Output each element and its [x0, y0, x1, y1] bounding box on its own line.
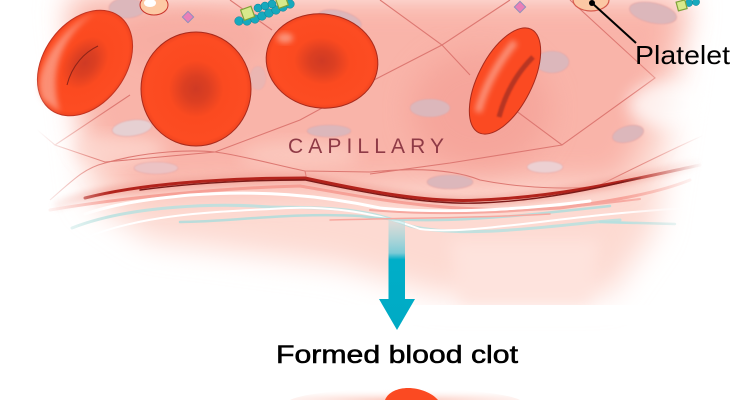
label: capillary: CAPILLARY — [288, 135, 444, 158]
red blood cell 1 — [18, 0, 152, 134]
down arrow — [379, 220, 415, 330]
vessel wall — [50, 160, 715, 210]
fibrin chain left — [235, 0, 294, 25]
platelet right — [573, 0, 609, 11]
heading: formed blood clot: Formed blood clot — [276, 341, 518, 369]
cell nuclei — [109, 0, 679, 189]
tissue background — [65, 0, 712, 325]
platelet left — [140, 0, 168, 15]
platelet leader line — [589, 0, 636, 43]
red blood cell 4 — [455, 17, 555, 145]
clotting factor diamonds — [182, 1, 526, 23]
red blood cell 3 — [260, 7, 384, 115]
label: platelet: Platelet — [635, 40, 731, 70]
fibrin chain right — [676, 0, 700, 11]
endothelial cell borders — [8, 0, 715, 200]
vessel wall fibres — [72, 193, 690, 238]
red blood cell 2 — [141, 32, 251, 146]
blood clot — [290, 388, 520, 400]
